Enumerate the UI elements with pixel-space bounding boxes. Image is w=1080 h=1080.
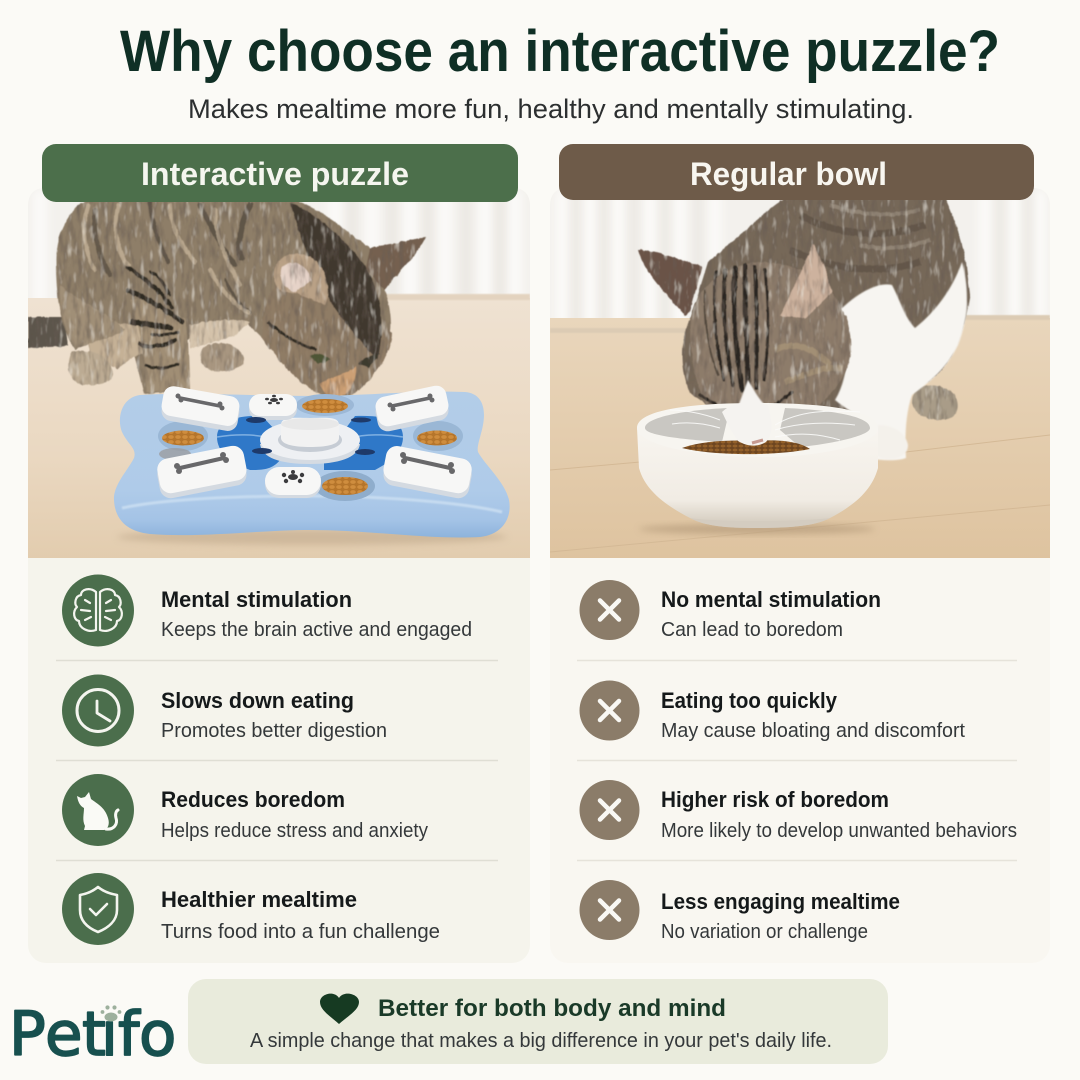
icon: heart — [320, 994, 359, 1024]
text: reduces boredom — [161, 787, 428, 842]
row 4 — [62, 873, 440, 945]
text: healthier mealtime: Turns food into a fun challenge — [161, 921, 440, 943]
photo: cat with puzzle feeder — [28, 188, 530, 560]
curtain background — [28, 188, 530, 560]
puzzle feeder toy — [114, 384, 510, 545]
text: healthier mealtime — [161, 887, 440, 943]
icon: cross — [580, 580, 640, 640]
text: less engaging mealtime: Less engaging mealtime — [661, 889, 900, 914]
heading: regular bowl — [559, 144, 1034, 200]
text: no mental stimulation — [661, 587, 881, 641]
heading: interactive puzzle — [42, 144, 518, 202]
row 2 — [62, 674, 387, 746]
fur stripes — [94, 200, 250, 368]
row 3 — [62, 774, 428, 846]
icon: shield check — [62, 873, 134, 945]
text: healthier mealtime: Healthier mealtime — [161, 887, 357, 912]
row 1 — [62, 574, 472, 646]
cat fur — [638, 198, 970, 430]
text: mental stimulation: Keeps the brain active and engaged — [161, 619, 472, 641]
callout: better for both body and mind — [188, 979, 888, 1064]
text: higher risk of boredom: Higher risk of boredom — [661, 787, 889, 812]
text: reduces boredom: Helps reduce stress and anxiety — [161, 820, 428, 842]
wells with kibble — [296, 394, 354, 416]
curtain and floor background — [550, 188, 1050, 560]
text: eating too quickly: Eating too quickly — [661, 688, 838, 713]
cat — [28, 198, 426, 399]
panel: interactive puzzle — [28, 188, 530, 963]
blue rotating ring — [217, 416, 280, 470]
text: no mental stimulation: Can lead to boredom — [661, 619, 843, 641]
row 4 — [580, 880, 900, 943]
bone keys — [157, 406, 472, 498]
text: less engaging mealtime — [661, 889, 900, 943]
row 1 — [580, 580, 881, 641]
text: slows down eating: Promotes better digestion — [161, 720, 387, 742]
panel: regular bowl — [550, 188, 1050, 963]
cat muzzle — [738, 380, 764, 404]
text: higher risk of boredom: More likely to develop unwanted behaviors — [661, 820, 1017, 842]
icon: cat silhouette — [62, 774, 134, 846]
text: no mental stimulation: No mental stimulation — [661, 587, 881, 612]
text: mental stimulation: Mental stimulation — [161, 587, 352, 612]
callout heading: Better for both body and mind — [378, 995, 726, 1022]
icon: paw — [101, 1004, 121, 1022]
icon: cross — [580, 880, 640, 940]
text: eating too quickly: May cause bloating and discomfort — [661, 720, 965, 742]
icon: brain — [62, 574, 134, 646]
text: eating too quickly — [661, 688, 965, 742]
heading: regular bowl: Regular bowl — [690, 156, 887, 192]
text: reduces boredom: Reduces boredom — [161, 787, 345, 812]
heading: interactive puzzle: Interactive puzzle — [141, 156, 409, 192]
icon: cross — [580, 680, 640, 740]
title: Why choose an interactive puzzle? — [120, 19, 1000, 84]
subtitle: Makes mealtime more fun, healthy and mentally stimulating. — [188, 94, 914, 124]
text: mental stimulation — [161, 587, 472, 641]
icon: clock — [62, 674, 134, 746]
bowl — [637, 402, 878, 534]
row 3 — [580, 780, 1017, 842]
photo: cat eating from bowl — [550, 188, 1050, 560]
text: slows down eating: Slows down eating — [161, 688, 354, 713]
icon: cross — [580, 780, 640, 840]
text: higher risk of boredom — [661, 787, 1017, 842]
cat head — [690, 244, 852, 406]
logo: Petifo: Petifo — [9, 999, 176, 1070]
callout text: A simple change that makes a big difference in your pet's daily life. — [250, 1030, 832, 1052]
text: less engaging mealtime: No variation or challenge — [661, 921, 868, 943]
text: slows down eating — [161, 688, 387, 742]
cat white chest — [835, 262, 967, 460]
row 2 — [580, 680, 965, 742]
